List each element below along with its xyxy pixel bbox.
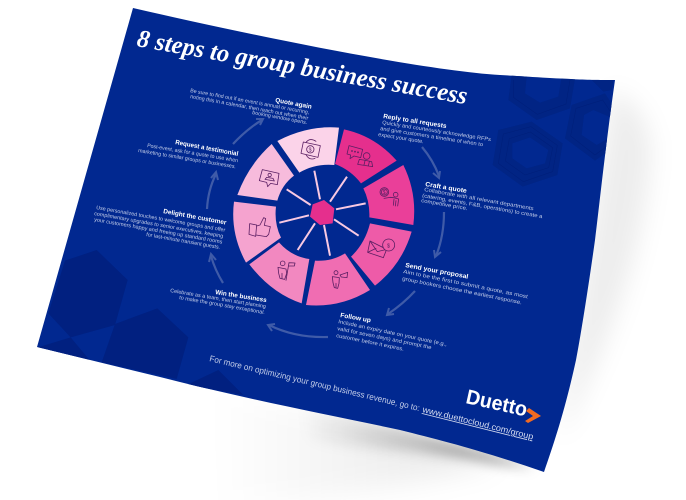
text: quote again: Be sure to find out if an event is annual or recurring, (190, 88, 310, 116)
text: reply to all requests: and give customers a timeline of when to (380, 126, 483, 148)
text: send your proposal: group bookers choose the earliest response. (402, 276, 522, 306)
text: quote again: noting this in a calendar, then reach out when their (190, 94, 309, 122)
footer call to action (209, 353, 535, 442)
segment: send your proposal (351, 223, 412, 286)
text: send your proposal: Aim to be the first to submit a quote, as most (403, 269, 529, 300)
text: reply to all requests: expect your quote. (378, 132, 424, 145)
text: follow up: customer before it expires. (336, 333, 404, 353)
segment: win the business (249, 242, 309, 303)
text: craft a quote: Collaborate with all relevant departments (424, 187, 534, 212)
arrow: to send your proposal (434, 212, 444, 257)
step wheel (233, 127, 414, 306)
text: craft a quote: (catering, events, F&B, operations) to create a (422, 193, 543, 220)
background hexagons bottom left (37, 250, 243, 395)
text: send your proposal (402, 262, 529, 306)
text: delight the customer: your customers happy and freeing up standard rooms (94, 217, 223, 246)
step wheel: $ (309, 147, 312, 153)
segment: delight the customer (233, 202, 281, 263)
footer call to action: For more on optimizing your group business revenue, go to: (209, 353, 421, 413)
segment: request a testimonial (237, 144, 294, 201)
text: win the business: to make the group stay exceptional. (179, 295, 265, 316)
text: craft a quote: Craft a quote (425, 181, 468, 195)
arrow: to craft a quote (422, 147, 440, 178)
title: 8 steps to group business success (135, 25, 470, 110)
spokes (279, 171, 366, 256)
text: follow up: Follow up (340, 312, 371, 324)
logo: Duetto: Duetto (464, 385, 529, 421)
step wheel: $ (387, 243, 390, 249)
icon: reply speech bubble and person (347, 146, 373, 167)
text: delight the customer: for last-minute transient guests. (146, 232, 221, 251)
text: win the business: Win the business (215, 289, 268, 304)
text: follow up (336, 312, 447, 353)
centre hexagon (310, 200, 334, 225)
icon: person with megaphone (332, 271, 348, 288)
text: reply to all requests (378, 113, 492, 148)
text: send your proposal: Send your proposal (405, 262, 469, 281)
arrow: to win the business (268, 324, 328, 337)
icon: thumbs up (249, 218, 270, 237)
text: request a testimonial: Request a testimonial (175, 139, 239, 158)
segment: follow up (306, 253, 370, 306)
text: request a testimonial (138, 139, 239, 170)
text: delight the customer: Delight the customer (163, 208, 227, 227)
text: craft a quote (421, 181, 543, 220)
footer call to action: www.duettocloud.com/group (420, 404, 535, 442)
text: delight the customer: Use personalized touches to welcome groups and offer (96, 205, 226, 234)
arrow: to delight the customer (209, 254, 223, 283)
icon: banknote with arrows (301, 140, 320, 159)
text: request a testimonial: Post-event, ask for a quote to use when (147, 143, 238, 164)
text: follow up: valid for seven days) and prompt the (337, 326, 432, 351)
icon: person with flag (278, 261, 295, 280)
segment: reply to all requests (335, 129, 397, 183)
arrow: to request a testimonial (207, 172, 218, 209)
segment: quote again (277, 127, 339, 173)
text: quote again: Quote again (275, 97, 312, 111)
text: delight the customer (94, 205, 227, 251)
text: reply to all requests: Reply to all requests (383, 113, 447, 130)
step wheel: $ (383, 190, 386, 196)
segment: craft a quote (363, 165, 414, 225)
text: follow up: Include an expiry date on your quote (e.g., (338, 319, 447, 348)
text: delight the customer: complimentary upgrades to senior executives, keeping (94, 211, 224, 240)
shadow under sheet (215, 90, 651, 500)
text: quote again: booking window opens. (252, 110, 308, 126)
background outlined hexagons top right (493, 75, 620, 187)
text: reply to all requests: Quickly and courteously acknowledge RFPs (382, 120, 492, 143)
arrow: to quote again (233, 119, 263, 144)
icon: testimonial bubble with person (259, 170, 279, 187)
text: request a testimonial: marketing to similar groups or businesses. (138, 148, 236, 170)
text: craft a quote: competitive price. (421, 198, 468, 212)
poster sheet (37, 8, 615, 472)
icon: dollar coin and person (380, 188, 399, 206)
text: win the business: Celebrate as a team, then start planning (170, 288, 266, 310)
arrow: to follow up (387, 291, 415, 315)
icon: envelope and dollar coin (368, 239, 395, 258)
